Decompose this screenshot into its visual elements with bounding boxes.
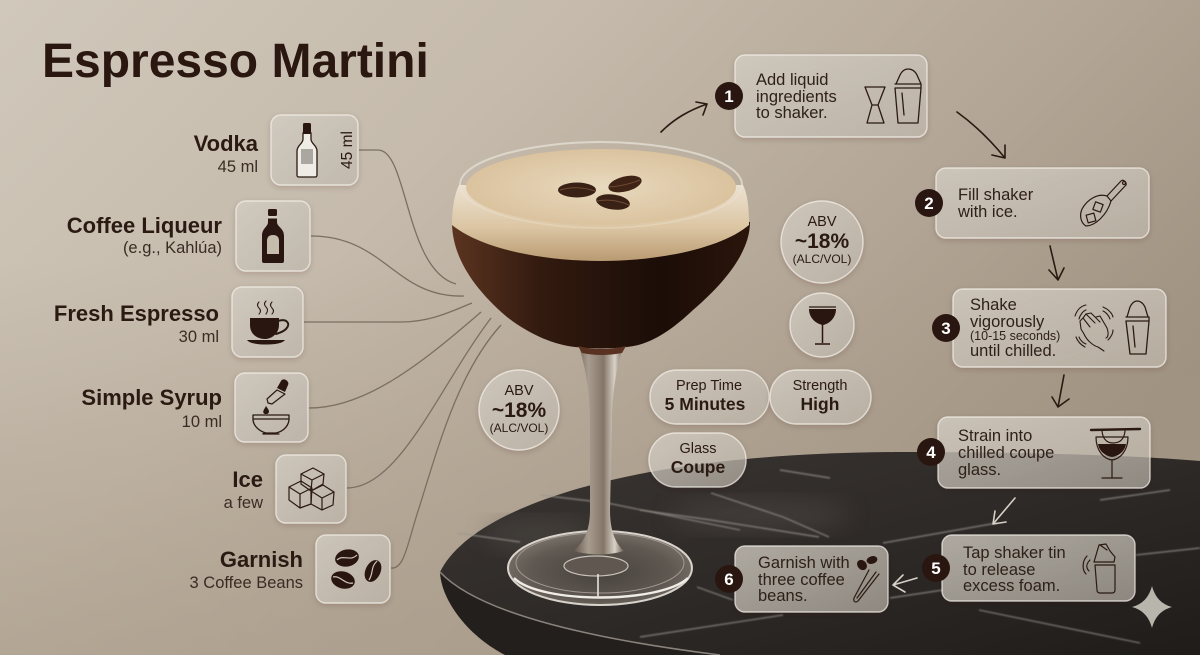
- stat: ABV left: (ALC/VOL): [490, 421, 548, 435]
- ingredient: fresh espresso: [54, 287, 303, 357]
- step 2: 2: [924, 194, 934, 213]
- ingredient: coffee liqueur: [67, 201, 310, 271]
- arrow: step 4 to step 5: [993, 498, 1015, 524]
- pill: strength: Strength: [793, 378, 847, 394]
- arrow: step 3 to step 4: [1052, 375, 1069, 407]
- ingredient: fresh espresso: Fresh Espresso: [54, 301, 219, 326]
- stat: ABV left: [479, 370, 559, 450]
- icon: coupe glass badge: [790, 293, 854, 357]
- step 4: [917, 417, 1150, 488]
- step 5: to release: [963, 561, 1035, 579]
- glass stem: [573, 350, 624, 554]
- step 3: until chilled.: [970, 342, 1056, 360]
- step 6: three coffee: [758, 571, 845, 589]
- arrow: step 2 to step 3: [1049, 246, 1064, 280]
- connector lines: ingredients to glass: [304, 150, 501, 568]
- icon: beans and tongs: [854, 555, 879, 602]
- ingredient: vodka: Vodka: [194, 131, 259, 156]
- step 4: chilled coupe: [958, 444, 1054, 462]
- step 1: [715, 55, 927, 137]
- ingredient: simple syrup: [81, 373, 308, 442]
- pill: glass: [649, 433, 746, 487]
- ingredient: fresh espresso: 30 ml: [179, 328, 219, 346]
- step 5: 5: [931, 559, 941, 578]
- arrow: step 1 to step 2: [957, 112, 1005, 158]
- stat: ABV right: [781, 201, 863, 283]
- ingredient: ice: [224, 455, 346, 523]
- glass bowl liquid: [452, 222, 750, 348]
- step 4: glass.: [958, 461, 1001, 479]
- step 2: Fill shaker: [958, 186, 1034, 204]
- arrow: glass to step 1: [661, 102, 707, 132]
- step 2: [915, 168, 1149, 238]
- step 1: Add liquid: [756, 71, 828, 89]
- pill: strength: High: [801, 394, 839, 414]
- pill: glass: Glass: [679, 441, 717, 457]
- ingredient: garnish: Garnish: [220, 547, 303, 572]
- icon: shaking hand: [1075, 305, 1113, 351]
- ingredient: garnish: 3 Coffee Beans: [190, 574, 303, 592]
- icon: jigger and shaker: [865, 69, 921, 123]
- step 3: Shake: [970, 296, 1017, 314]
- step 1: 1: [724, 87, 734, 106]
- step 4: Strain into: [958, 427, 1032, 445]
- foam band: [452, 185, 749, 261]
- step 6: [715, 546, 888, 612]
- ingredient: simple syrup: Simple Syrup: [81, 385, 222, 410]
- ingredient: garnish: [190, 535, 390, 603]
- step 5: excess foam.: [963, 577, 1060, 595]
- step 6: beans.: [758, 587, 808, 605]
- step 3: (10-15 seconds): [970, 329, 1060, 343]
- foam top: [466, 149, 736, 225]
- stat: ABV right: ABV: [807, 214, 837, 230]
- pill: strength: [770, 370, 871, 424]
- step 3: [932, 289, 1166, 367]
- coffee beans on foam: [558, 173, 643, 212]
- ingredient: vodka: [194, 115, 358, 185]
- icon: cocktail shaker: [1126, 301, 1149, 354]
- pill: prep time: Prep Time: [676, 378, 742, 394]
- step 3: 3: [941, 319, 951, 338]
- pill: glass: Coupe: [671, 457, 725, 477]
- ingredient: ice: Ice: [232, 467, 263, 492]
- stat: ABV left: ~18%: [492, 399, 546, 422]
- glass rim: [460, 142, 742, 228]
- glass foot: [508, 531, 692, 605]
- icon: tapped shaker: [1083, 544, 1115, 593]
- step 6: 6: [724, 570, 734, 589]
- pill: prep time: 5 Minutes: [665, 394, 746, 414]
- cocktail glass: [452, 142, 750, 605]
- step 6: Garnish with: [758, 554, 850, 572]
- sparkle mark: [1132, 586, 1172, 628]
- step 3: vigorously: [970, 313, 1045, 331]
- step 1: ingredients: [756, 88, 837, 106]
- stat: ABV right: ~18%: [795, 230, 849, 253]
- ingredient: vodka: 45 ml: [218, 158, 258, 176]
- step 1: to shaker.: [756, 104, 828, 122]
- ingredient: coffee liqueur: (e.g., Kahlúa): [123, 239, 222, 257]
- icon: ice scoop: [1081, 180, 1126, 226]
- arrow: step 5 to step 6: [893, 575, 917, 592]
- stat: ABV right: (ALC/VOL): [793, 252, 851, 266]
- step 5: Tap shaker tin: [963, 544, 1066, 562]
- icon: strainer over coupe: [1091, 429, 1140, 478]
- ingredient: ice: a few: [224, 494, 263, 512]
- ingredient: coffee liqueur: Coffee Liqueur: [67, 213, 222, 238]
- pill: prep time: [650, 370, 769, 424]
- ingredient: simple syrup: 10 ml: [182, 413, 222, 431]
- title: Espresso Martini: [42, 35, 429, 88]
- step 5: [922, 535, 1135, 601]
- marble table: [440, 452, 1200, 655]
- step 2: with ice.: [957, 203, 1018, 221]
- ingredient: vodka: 45 ml: [339, 131, 356, 169]
- step 4: 4: [926, 443, 936, 462]
- stat: ABV left: ABV: [504, 383, 534, 399]
